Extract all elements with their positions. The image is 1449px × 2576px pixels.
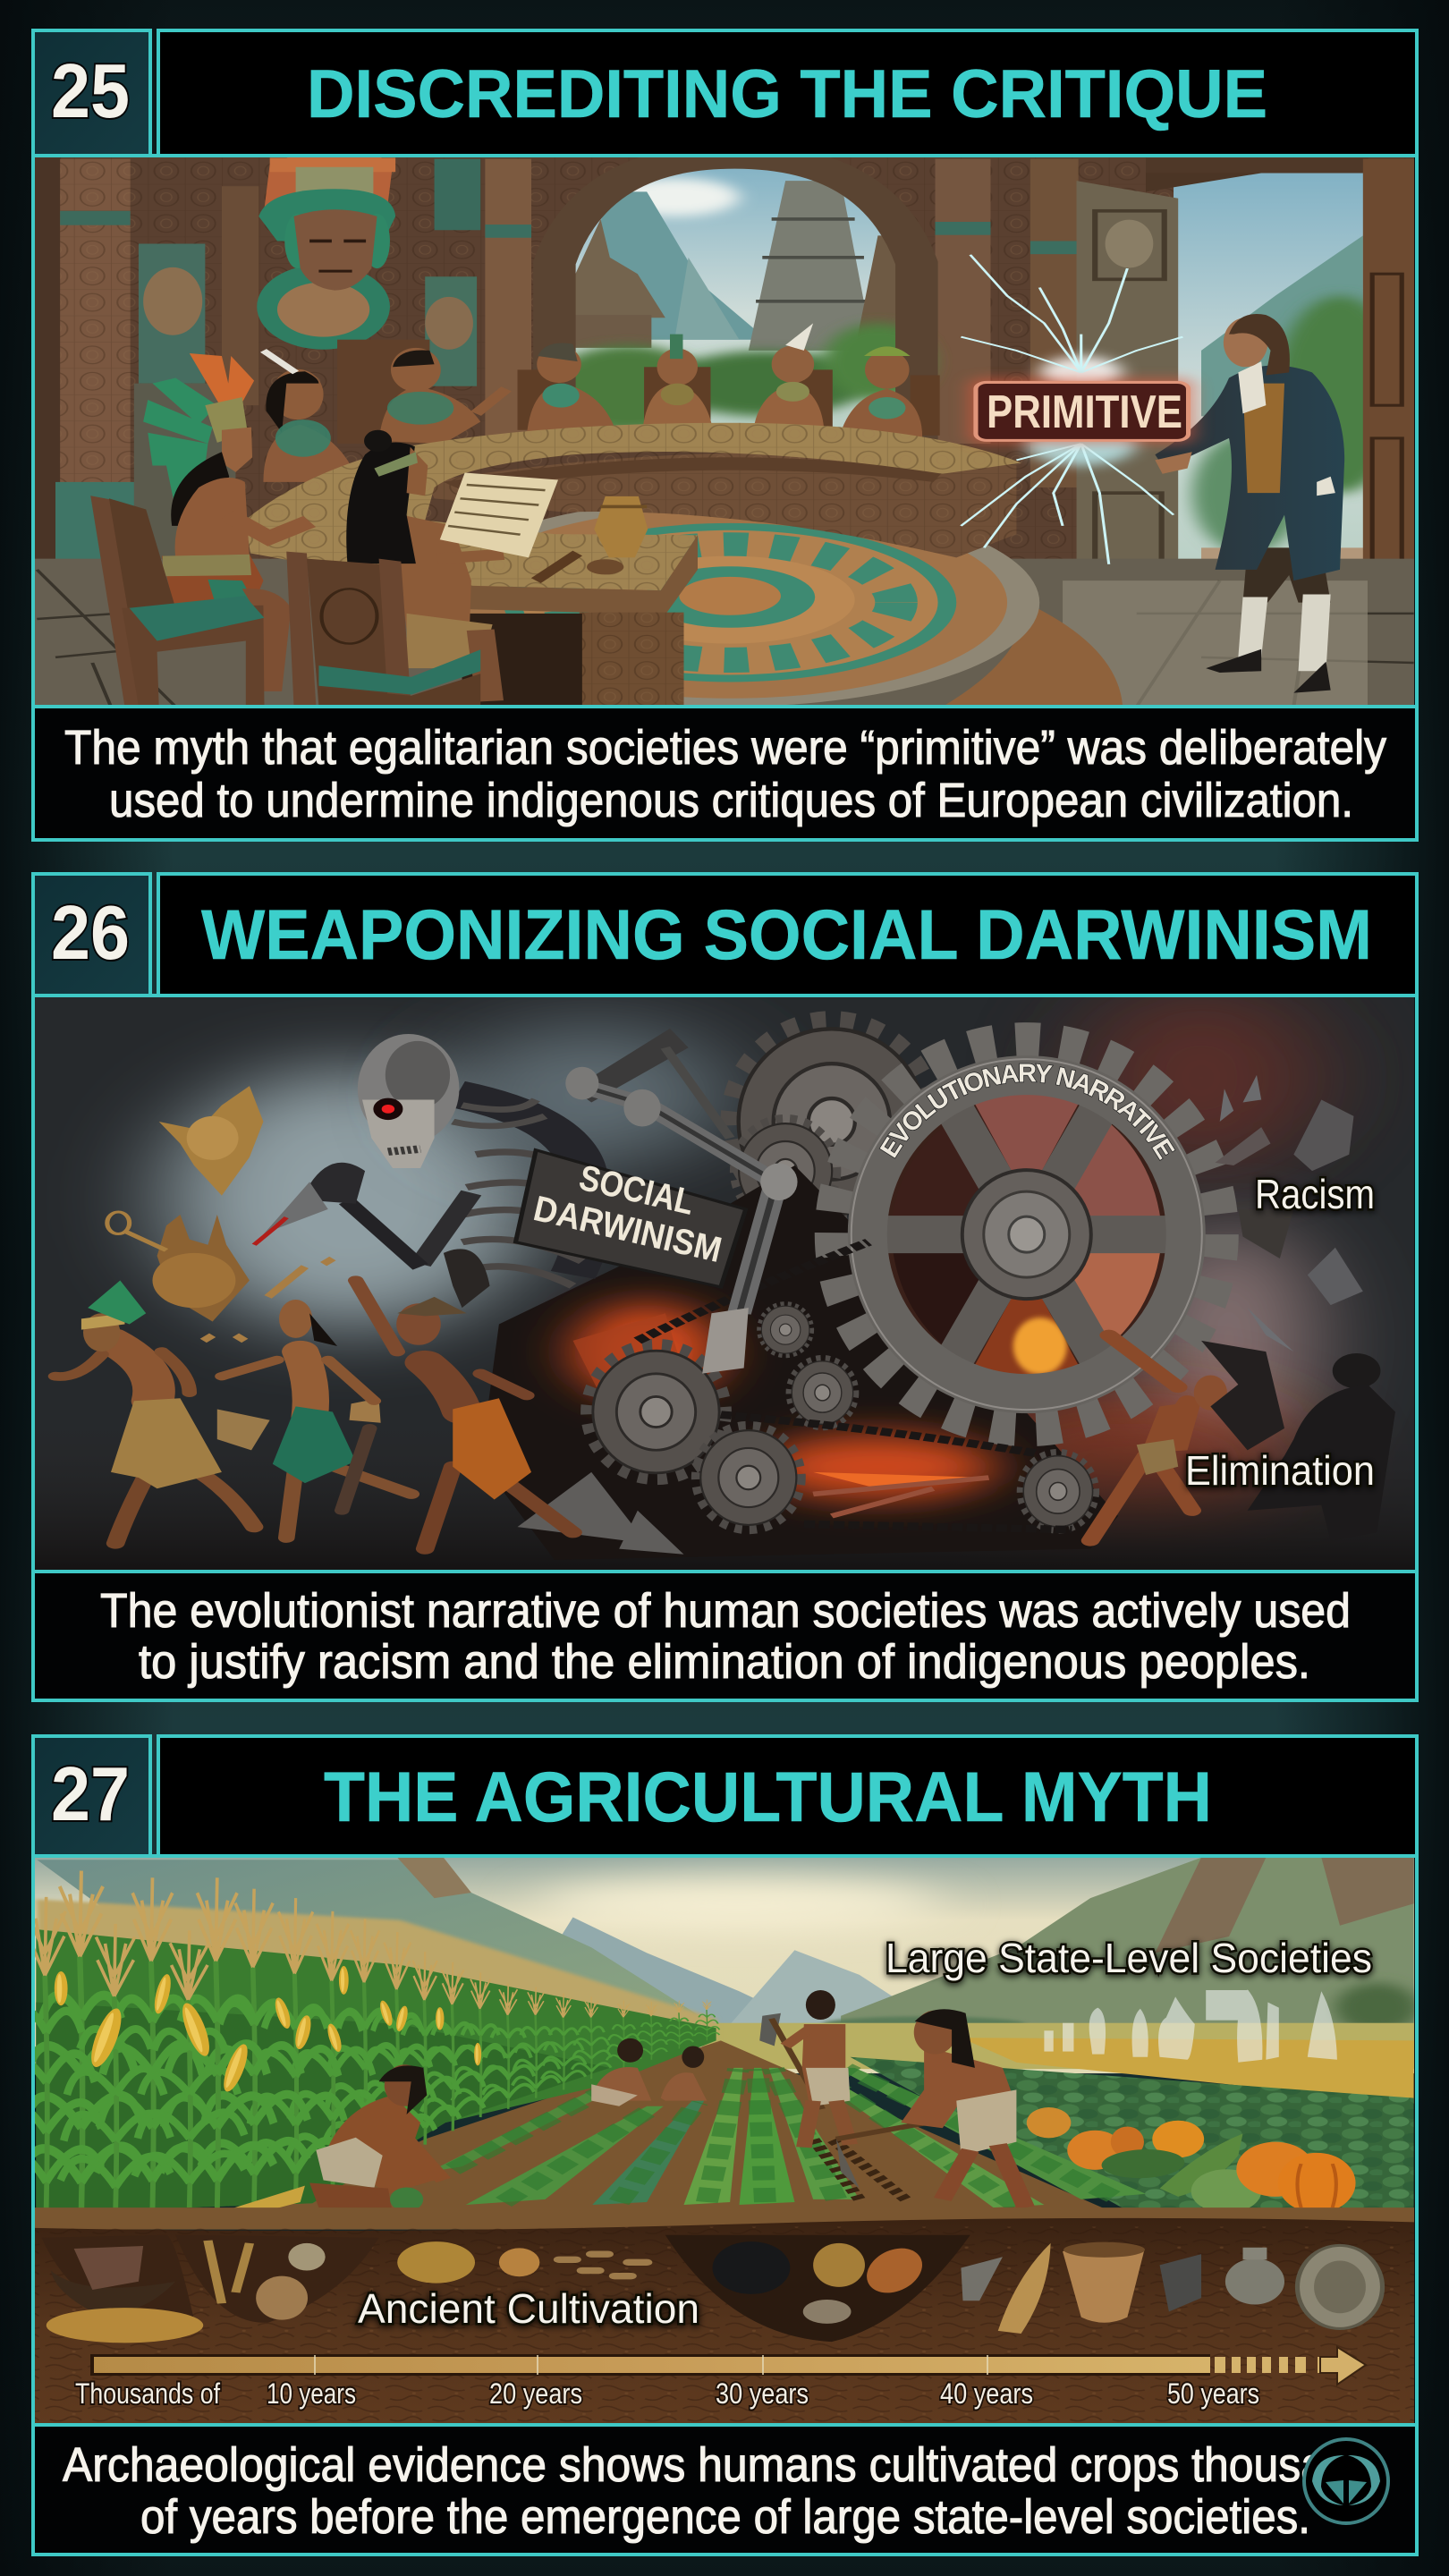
caption 26: The evolutionist narrative of human societies was actively used xyxy=(100,1584,1351,1638)
timeline labels: 10 years xyxy=(267,2377,356,2410)
caption 27: of years before the emergence of large state-level societies. xyxy=(140,2490,1310,2544)
caption 26: to justify racism and the elimination of indigenous peoples. xyxy=(139,1635,1310,1689)
social darwinism sign xyxy=(515,1150,746,1287)
large evolutionary narrative gear xyxy=(833,1040,1221,1428)
stormy background xyxy=(28,985,1423,1576)
stone bust with feathered headdress xyxy=(257,157,395,350)
standing farmer with hoe xyxy=(759,1990,850,2148)
frame line under image 25 xyxy=(33,156,1417,840)
frame line under image 27 xyxy=(33,1856,1417,2555)
back row chairs and seated council xyxy=(263,323,940,482)
furrowed ground and crop rows xyxy=(231,2040,1146,2227)
distant crouching farmers xyxy=(591,2038,707,2106)
buried pits and artifacts xyxy=(41,2235,1383,2343)
kneeling farmer xyxy=(205,2064,444,2220)
timeline labels: Thousands of xyxy=(75,2377,220,2410)
caption 26 xyxy=(35,1573,1415,1699)
illustration: early farmers in a cultivated field xyxy=(0,1854,1423,2429)
illustration: council chamber with the primitive label xyxy=(28,153,1423,712)
timeline arrow xyxy=(90,2347,1366,2385)
shattered pieces and victims on the right xyxy=(1090,1075,1395,1540)
number badge 25: 25 xyxy=(51,49,130,134)
frame line under image 26 xyxy=(33,996,1417,1700)
panel: 26 weaponizing social darwinism xyxy=(31,872,1419,1702)
lightning burst xyxy=(961,255,1182,564)
number badge 27: 27 xyxy=(51,1752,130,1837)
primitive text: PRIMITIVE xyxy=(987,386,1182,438)
timeline labels: 20 years xyxy=(489,2377,582,2410)
title bar 25: DISCREDITING THE CRITIQUE xyxy=(307,56,1267,132)
illustration: skeletal machine crushing indigenous people xyxy=(35,997,1414,1570)
number badge 27 xyxy=(33,1736,150,1856)
panel: 25 discrediting the critique xyxy=(28,30,1423,840)
timeline labels: 50 years xyxy=(1167,2377,1259,2410)
harvested vegetables and pumpkins xyxy=(1027,2107,1356,2213)
evolutionary narrative gear text: EVOLUTIONARY NARRATIVE xyxy=(878,1063,1175,1161)
title bar 27 xyxy=(158,1736,1417,1856)
sign text xyxy=(530,1149,734,1270)
arched window with landscape xyxy=(546,157,933,444)
sign text: SOCIAL xyxy=(575,1158,698,1223)
primitive label plate xyxy=(969,378,1195,444)
title bar 26: WEAPONIZING SOCIAL DARWINISM xyxy=(201,894,1372,974)
caption 25: used to undermine indigenous critiques of European civilization. xyxy=(109,774,1353,827)
foreground farmer with mattock xyxy=(836,2009,1026,2207)
panel: 27 the agricultural myth xyxy=(0,1736,1423,2555)
stone floor and circular mosaic xyxy=(35,512,1414,705)
council table top and legs xyxy=(245,423,1021,708)
icon: circular logo badge xyxy=(1304,2439,1388,2523)
title bar 25 xyxy=(158,30,1417,156)
machine body and fire xyxy=(480,1165,1118,1560)
chamber walls xyxy=(35,157,1414,559)
skeleton with dagger xyxy=(254,1029,798,1374)
front chair left xyxy=(90,496,264,707)
title bar 26 xyxy=(158,874,1417,996)
title bar 27: THE AGRICULTURAL MYTH xyxy=(324,1757,1212,1836)
number badge 26: 26 xyxy=(51,891,130,976)
number badge 26 xyxy=(33,874,150,996)
caption 25 xyxy=(35,708,1415,838)
ghost figures of state societies xyxy=(1044,1989,1337,2063)
sky and mountains xyxy=(28,1854,1423,2073)
label: large state-level societies: Large State-Level Societies xyxy=(886,1935,1372,1981)
front chair right xyxy=(286,552,480,707)
label: racism: Racism xyxy=(1255,1171,1375,1217)
fleeing figures xyxy=(55,1281,573,1549)
corn field xyxy=(0,1871,719,2213)
european man in colonial coat xyxy=(1155,314,1344,693)
label: elimination: Elimination xyxy=(1185,1447,1375,1494)
number badge 25 xyxy=(33,30,150,156)
curved council table xyxy=(427,453,1016,557)
distant fields xyxy=(702,2023,1423,2216)
timeline labels: 30 years xyxy=(716,2377,809,2410)
small gears and chain xyxy=(518,1242,1096,1555)
timeline labels xyxy=(75,2377,1259,2410)
woman reading scroll xyxy=(346,430,648,701)
soil cross section xyxy=(28,2207,1423,2429)
open doorway and exterior xyxy=(1077,158,1414,559)
label: ancient cultivation: Ancient Cultivation xyxy=(358,2285,699,2332)
feathered seated figure xyxy=(143,353,309,691)
back gears xyxy=(731,1021,933,1222)
caption 27 xyxy=(35,2427,1415,2553)
timeline labels: 40 years xyxy=(940,2377,1033,2410)
caption 27: Archaeological evidence shows humans cultivated crops thousa xyxy=(63,2438,1326,2492)
gold artifacts xyxy=(107,1086,381,1450)
sign text: DARWINISM xyxy=(530,1189,725,1270)
